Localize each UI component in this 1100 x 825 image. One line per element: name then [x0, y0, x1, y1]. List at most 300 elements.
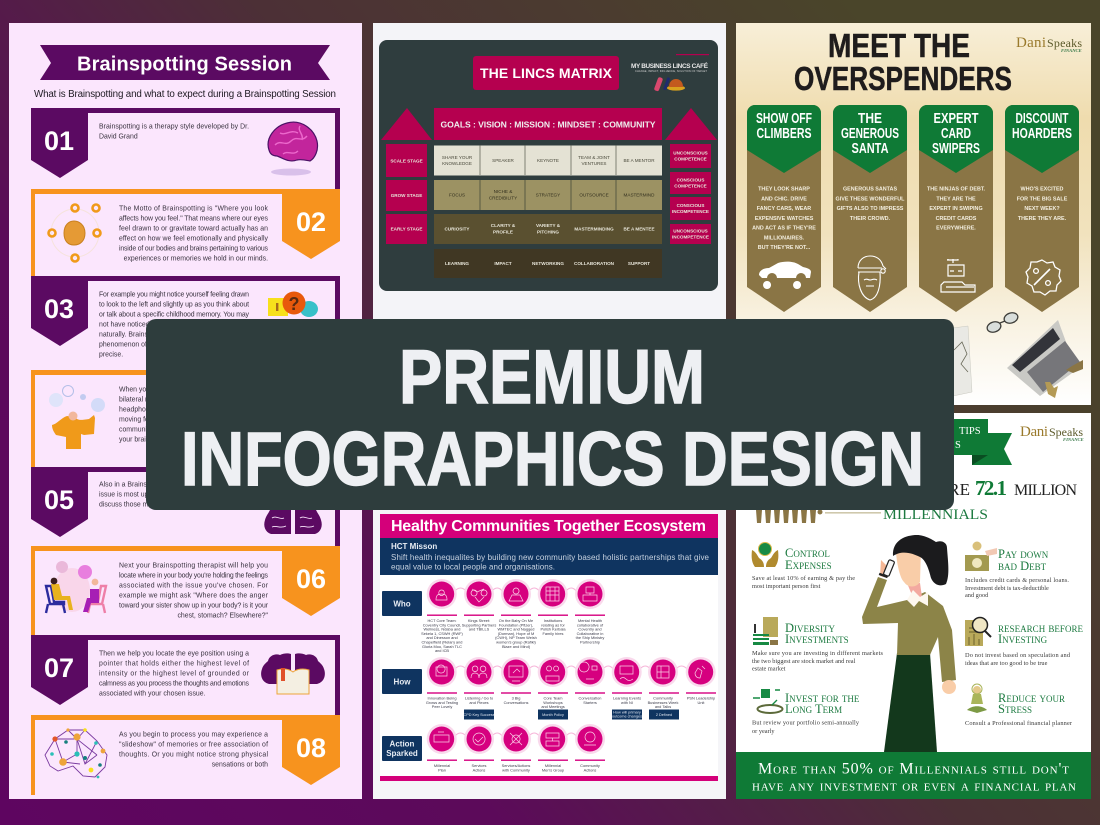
logo: Dani [1020, 424, 1048, 440]
card: show off climbers: THEY LOOK SHARP [758, 186, 810, 192]
card: the generous santa: THEIR CROWD. [850, 216, 891, 222]
logo: CHANGE, IMPACT, INFLUENCE, SOLUTION OF TARGET [635, 69, 707, 73]
tip: research before investing: research before [998, 621, 1084, 635]
step 07: pointer that holds either the highest level of [99, 660, 249, 668]
competence labels: INCOMPETENCE [672, 234, 709, 240]
tip: control expenses: most important person first [752, 583, 821, 590]
card: the generous santa [833, 105, 907, 312]
card: expert card swipers: EVERYWHERE. [936, 226, 976, 232]
icon: neural network brain [45, 728, 107, 778]
step 07: associated with your chosen issue. [99, 690, 206, 698]
row label: how [382, 669, 422, 694]
icon: brain with rings [48, 204, 100, 262]
tip: pay down bad debt: Includes credit cards & personal loans. [965, 577, 1069, 584]
matrix row: early: PROFILE [493, 230, 513, 234]
row: action captions [427, 760, 605, 772]
step 08: sensations or both [212, 762, 268, 768]
panel: healthy communities ecosystem [373, 505, 726, 799]
step 05: Also in a Brainspotting session [99, 482, 193, 488]
row: how captions [426, 692, 716, 720]
matrix row: grow [434, 180, 662, 210]
step 07 [31, 635, 340, 715]
matrix row: grow: OUTSOURCE [579, 192, 609, 198]
step 04: headphones [119, 406, 157, 414]
panel: millennials tips [736, 413, 1091, 799]
tip: invest for the long term: Invest for the [785, 691, 860, 705]
step 02: experiences or memories we hold in our minds. [124, 256, 268, 262]
matrix row: early: MASTERMINDING [574, 226, 614, 232]
row: who captions: Chapelfield (Relan) and [422, 640, 462, 644]
matrix row: early: CURIOSITY [444, 226, 470, 232]
row: who captions: Family hires [543, 631, 564, 636]
step 06 [31, 546, 340, 635]
row: who captions: Coventry and [578, 627, 602, 632]
card: discount hoarders: NEXT WEEK? [1024, 206, 1060, 212]
stage labels: EARLY STAGE [391, 226, 422, 232]
card: expert card swipers [919, 105, 993, 312]
row: action circles [427, 724, 605, 754]
heading ribbon: Brainspotting Session [77, 54, 292, 76]
icon: purple brain halves [264, 510, 322, 534]
step 03: to look to the left and slightly up as you think about [99, 302, 249, 308]
step 06: locate where in your body you're holding the feelings [119, 572, 269, 580]
tip: reduce your stress: Consult a Professional financial planner [965, 720, 1073, 727]
row label: action sparked: Action [390, 740, 415, 748]
icon: pink brain [268, 122, 318, 176]
row: action captions: Actions [473, 767, 485, 772]
step 02: inside of our bodies and brains pertaining to various [119, 246, 269, 252]
matrix row: early: VARIETY & [536, 223, 561, 228]
row: action captions: Millennial [545, 763, 561, 768]
matrix row: pillars [434, 249, 662, 278]
row: how captions: CPD Key Success [463, 713, 495, 717]
card: show off climbers: CLIMBERS [756, 126, 812, 142]
logo [1020, 424, 1084, 442]
connector waves [454, 588, 688, 737]
tip: diversify investments [752, 617, 884, 672]
card: show off climbers: AND CHIC. DRIVE [761, 196, 807, 202]
competence labels: INCOMPETENCE [672, 209, 709, 214]
step 06: 06 [296, 564, 326, 594]
footer callout: More than 50% of Millennials still don't [758, 760, 1069, 778]
stat headline: RE [948, 480, 970, 499]
tip: pay down bad debt: Investment debt is tax-deductible [965, 585, 1049, 592]
tip: research before investing: Do not invest based on speculation and [965, 652, 1071, 659]
matrix row: grow: NICHE & [494, 189, 512, 194]
card: expert card swipers: THE NINJAS OF DEBT. [927, 186, 986, 192]
step 06: example we might ask "Where does the anger [119, 592, 269, 600]
title: OVERSPENDERS [794, 60, 1012, 97]
step 05: discuss those moments [99, 502, 172, 508]
card: the generous santa: SANTA [852, 141, 889, 157]
mission box [380, 538, 718, 575]
tip: invest for the long term: But review your portfolio semi-annually [752, 720, 860, 726]
footer callout: have any investment or even a financial plan [752, 778, 1076, 794]
step 03: For example you might notice yourself feeling drawn [99, 292, 249, 298]
card: expert card swipers: THEY ARE THE [936, 196, 976, 202]
card: show off climbers: AND ACT AS IF THEY'RE [752, 226, 816, 232]
step 08: As you begin to process you may experience a [119, 732, 268, 738]
row: how captions: Conversation [579, 696, 601, 700]
tip: diversify investments: Investments [785, 632, 849, 646]
row: who captions: Supporting Partners [462, 622, 496, 627]
arrow: left triangle [381, 108, 432, 140]
row: who captions: the Ship Ministry [576, 635, 604, 640]
matrix row: pillars: IMPACT [494, 261, 512, 266]
card: the generous santa: GENEROUS SANTAS [843, 186, 897, 192]
row: how captions: 2 Defined [656, 713, 672, 717]
step 01: 01 [44, 126, 74, 156]
card: show off climbers: BUT THEY'RE NOT... [758, 245, 811, 251]
card: show off climbers: SHOW OFF [756, 111, 812, 127]
icon: question bubbles: ? [288, 294, 300, 314]
tip: control expenses [752, 542, 855, 590]
row: who captions: women's group (Rafiki) [496, 640, 537, 644]
row: who captions: collaborative of [577, 622, 604, 627]
ribbon heading: S [955, 440, 961, 451]
footer callout [736, 752, 1091, 799]
pictogram: people [756, 510, 881, 523]
logo: Dani [1016, 35, 1046, 51]
heading ribbon [40, 45, 330, 80]
step 04: When you are [119, 386, 162, 394]
matrix row: early [434, 214, 662, 244]
matrix row: pillars: COLLABORATION [574, 261, 615, 266]
row: how captions: Learning Events [613, 696, 641, 700]
card: expert card swipers: EXPERT [934, 111, 979, 127]
row: who captions: and Dinesson and [426, 635, 458, 640]
panel: lincs matrix [373, 23, 726, 323]
step 04: communicate [119, 426, 160, 434]
step 03 [31, 276, 340, 370]
tip: invest for the long term: or yearly [752, 728, 775, 735]
step 04 [31, 370, 340, 467]
tip: control expenses: Expenses [785, 558, 832, 572]
ribbon heading [940, 419, 1012, 465]
step 06: chest, stomach? Elsewhere?" [177, 612, 269, 620]
row: how circles [427, 657, 716, 687]
competence labels [670, 144, 711, 244]
matrix row: scale: KNOWLEDGE [442, 161, 472, 166]
tip: control expenses: Save at least 10% of earning & pay the [752, 575, 855, 582]
row: how captions: with NI [621, 700, 633, 705]
title [794, 27, 1012, 97]
tip: pay down bad debt: Pay down [998, 547, 1049, 561]
row: who captions [421, 614, 605, 653]
mission box: Shift health inequalites by building new community based holistic partnerships that give [391, 553, 710, 562]
row: who captions: Sekela 1, CSWH (RWF) [421, 631, 464, 636]
matrix row: early: PITCHING [537, 230, 559, 234]
matrix row: scale: VENTURES [581, 161, 607, 166]
row: who captions: Collaborative in [577, 631, 603, 636]
card: show off climbers: MILLIONAIRES. [764, 235, 805, 241]
icon: therapy conversation [46, 561, 106, 613]
step 03: precise. [99, 352, 123, 358]
tip: research before investing: ideas that are too good to be true [965, 660, 1048, 667]
row: action captions: Plan [438, 767, 446, 772]
step 07: 07 [44, 653, 74, 683]
competence labels: UNCONSCIOUS [673, 228, 708, 234]
footer bar [380, 776, 718, 781]
tip: reduce your stress [965, 684, 1073, 727]
row: how captions: 3 Big [512, 696, 520, 700]
tip: invest for the long term: Long Term [785, 702, 842, 716]
card: the generous santa: GIFTS ALSO TO IMPRESS [837, 206, 904, 212]
step 02 [31, 189, 340, 276]
matrix row: scale: TEAM & JOINT [578, 155, 610, 160]
tip: pay down bad debt [965, 542, 1069, 599]
step 07: intensity or the highest level of grounded or [99, 670, 250, 678]
tip: invest for the long term [752, 689, 860, 735]
matrix row: pillars: NETWORKING [532, 261, 564, 266]
matrix row: pillars: SUPPORT [628, 261, 650, 266]
card: discount hoarders: FOR THE BIG SALE [1017, 196, 1068, 202]
matrix row: grow: STRATEGY [536, 192, 560, 198]
card: show off climbers: FANCY CARS, WEAR [757, 206, 811, 212]
row label: action sparked [382, 736, 422, 761]
logo [631, 54, 709, 92]
card: show off climbers: EXPENSIVE WATCHES [755, 216, 814, 222]
matrix row: pillars: LEARNING [445, 261, 469, 266]
row: who captions: WMTEC and Nagged [498, 627, 534, 632]
row: action captions: Millennial [434, 763, 450, 768]
icon: thinking person [49, 386, 105, 449]
stat headline: 72.1 [975, 476, 1007, 500]
step 02: affects how you feel." That means where our eyes [119, 216, 269, 222]
stat headline [883, 476, 1077, 523]
tip: reduce your stress: Stress [998, 702, 1032, 716]
row: who captions: Gloria Moo, Sarah TLC [422, 644, 462, 649]
row: how captions: Starters [583, 700, 597, 705]
step 01 [31, 108, 340, 189]
title overlay banner [146, 319, 954, 510]
mission box: equal value to local people and organisations. [391, 562, 555, 572]
stat headline: MILLION [1014, 482, 1077, 499]
row label: action sparked: Sparked [386, 749, 418, 758]
row: who captions: Coventry City Council, [423, 622, 461, 627]
competence labels: COMPETENCE [674, 184, 707, 188]
row: action captions: Services/Actions [502, 763, 530, 768]
card: expert card swipers: CARD [941, 126, 971, 142]
step 04: your brain [119, 436, 150, 444]
goals bar [434, 108, 662, 140]
row: how captions: and Meetings [541, 704, 565, 709]
step 04: bilateral music [119, 396, 164, 404]
tip: research before investing [965, 618, 1084, 667]
row: who captions: Mental Health [578, 618, 602, 623]
tip: control expenses: Control [785, 546, 830, 560]
competence labels: UNCONSCIOUS [673, 150, 708, 156]
row: how captions: Businesses Week [648, 700, 678, 705]
tip: research before investing: Investing [998, 632, 1048, 646]
step 03: 03 [44, 294, 74, 324]
heading: THE LINCS MATRIX [480, 65, 613, 81]
logo: Speaks [1049, 425, 1083, 439]
card: the generous santa: THE [858, 111, 882, 127]
card: expert card swipers: CREDIT CARDS [936, 216, 977, 222]
heading bar: Healthy Communities Together Ecosystem [391, 518, 706, 535]
row label: who [382, 591, 422, 616]
matrix row: scale: SPEAKER [492, 158, 515, 163]
logo: Speaks [1047, 36, 1082, 50]
step 01: David Grand [99, 134, 138, 140]
matrix row: scale: SHARE YOUR [442, 155, 473, 160]
logo: MY BUSINESS LINCS CAFÉ [631, 61, 709, 70]
illustration: glasses [986, 311, 1019, 334]
step 08 [31, 715, 340, 795]
tip: pay down bad debt: and good [965, 592, 989, 599]
row: how captions: Conversations [504, 700, 528, 705]
goals bar: GOALS : VISION : MISSION : MINDSET : COMMUNITY [440, 120, 656, 130]
step 06: Next your Brainspotting therapist will help you [119, 562, 268, 570]
step 04: moving focus [119, 416, 160, 424]
row: who captions: and TBILLS [469, 627, 490, 632]
step 02: The Motto of Brainspotting is "Where you look [119, 206, 269, 212]
row: who captions: HCT Core Team: [427, 618, 457, 623]
matrix row: early: BE A MENTEE [623, 226, 655, 232]
icon: santa [858, 256, 886, 300]
card: the generous santa: GIVE THESE WONDERFUL [836, 196, 905, 202]
row: who captions: and ICB [435, 648, 449, 653]
icon: card machine [941, 259, 975, 292]
matrix row: early: CLARITY & [491, 223, 516, 228]
row: who captions: Blaze and Mind) [502, 644, 531, 649]
row: who captions: (CWH), NP Team Welsh [495, 635, 537, 640]
row: action captions: Services [472, 763, 487, 768]
step 02: feel drawn to or gravitate toward actually has an [119, 226, 268, 232]
matrix row: grow: FOCUS [449, 192, 465, 198]
step 08: "slideshow" of memories or free association of [119, 742, 268, 748]
card: show off climbers [747, 105, 821, 312]
heading [473, 56, 619, 90]
step 05: issue is most upsetting to you [99, 492, 190, 498]
row: who captions: Wellness, Ndaba and [424, 627, 460, 632]
step 07: Then we help you locate the eye position using a [99, 650, 249, 658]
title line 1: PREMIUM [399, 335, 705, 420]
row: how captions: Community [653, 696, 673, 700]
title line 2: INFOGRAPHICS DESIGN [181, 417, 924, 502]
row: how captions: Workshops [543, 700, 563, 705]
row: how captions: Unit [698, 700, 705, 705]
tip: pay down bad debt: bad Debt [998, 559, 1047, 573]
row: how captions: Core Team [544, 696, 562, 700]
icon: percent badge [1026, 260, 1061, 295]
illustration: woman on phone [862, 535, 956, 752]
step 03: not have noticed this before but [99, 322, 195, 328]
logo: FINANCE [1061, 48, 1082, 53]
row: how captions: Peer Lovely [432, 704, 452, 709]
step 02: 02 [296, 207, 326, 237]
logo: FINANCE [1063, 437, 1084, 442]
step 03: or talk about a specific childhood memory. You may [99, 312, 250, 318]
row: who captions: relating as for [541, 622, 565, 627]
ribbon heading: TIPS [959, 426, 981, 437]
title: MEET THE [828, 27, 970, 64]
row: who captions: Polish Kerbala [540, 627, 566, 632]
step 02: effect on how we feel emotionally and physically [119, 236, 269, 242]
tip: reduce your stress: Reduce your [998, 691, 1065, 705]
step 03: naturally. Brainspotting uses this [99, 332, 198, 338]
card: discount hoarders [1005, 105, 1079, 312]
illustration: laptop [1007, 320, 1083, 398]
icon: car [759, 262, 811, 289]
row: how captions: outcome changes [612, 714, 642, 718]
step 08: thoughts. Or you might notice strong physical [119, 752, 268, 758]
row: who circles [427, 579, 605, 609]
stage labels: SCALE STAGE [390, 158, 423, 164]
step 07: calmness as you process the thoughts and emotions [99, 680, 250, 688]
competence labels: CONSCIOUS [677, 178, 704, 182]
mission box: HCT Misson [391, 542, 437, 551]
icon: brain and book [261, 653, 325, 694]
row: how captions: How will primary [613, 710, 641, 714]
tip: diversify investments: Diversity [785, 621, 836, 635]
tip: diversify investments: the two biggest are stock market and real [752, 658, 856, 665]
row: who captions: Partnership [580, 640, 600, 644]
stat headline: MILLENNIALS [883, 507, 988, 523]
row: who captions: On the Baby On Me [499, 618, 533, 623]
row: who captions: Institutions [544, 618, 562, 623]
stage labels: GROW STAGE [391, 193, 422, 198]
panel: meet the overspenders [736, 23, 1091, 405]
card: discount hoarders: THERE THEY ARE. [1018, 216, 1067, 222]
card: discount hoarders: DISCOUNT [1016, 111, 1069, 127]
row: who captions: Foundation (Pfizer), [499, 622, 533, 627]
heading bar [380, 514, 718, 538]
card: expert card swipers: EXPERT IN SWIPING [929, 206, 983, 212]
row: how captions: PSN Leadership [687, 696, 715, 700]
row: who captions: (Dorman), Hope of M [498, 631, 534, 636]
matrix row: grow: CREDIBILITY [489, 196, 517, 200]
stage labels [386, 144, 427, 244]
subtitle: What is Brainspotting and what to expect during a Brainspotting Session [34, 89, 336, 100]
step 05 [31, 467, 340, 546]
panel: brainspotting session [9, 23, 362, 799]
matrix row: grow: MASTERMIND [624, 192, 655, 198]
icon: question bubbles [268, 292, 318, 317]
step 06: toward your sister show up in your body? is it your [119, 602, 269, 610]
matrix row: scale: BE A MENTOR [623, 158, 655, 163]
row: action captions: Actions [584, 767, 596, 772]
card: the generous santa: GENEROUS [841, 126, 899, 142]
row: action captions: with Community [502, 767, 530, 772]
arrow: right triangle [665, 108, 717, 140]
card: discount hoarders: WHO'S EXCITED [1021, 186, 1064, 192]
card: expert card swipers: SWIPERS [932, 141, 980, 157]
competence labels: CONSCIOUS [677, 203, 704, 208]
matrix row: scale [434, 145, 662, 176]
row: how captions: Month Policy [542, 713, 564, 717]
step 03: phenomenon of eye position to be [99, 342, 203, 348]
row: how captions: Innovation Being [428, 696, 456, 700]
logo [1016, 35, 1082, 53]
step 05: 05 [44, 485, 74, 515]
step 01: Brainspotting is a therapy style developed by Dr. [99, 124, 249, 130]
matrix row: scale: KEYNOTE [537, 158, 559, 163]
tip: diversify investments: estate market [752, 666, 786, 672]
row: who captions: Kings Street: [468, 618, 490, 623]
row: how captions: and Talks [655, 704, 671, 709]
row: how captions: and Pieces [469, 700, 489, 705]
row: action captions: Men's Group [542, 767, 564, 772]
competence labels: COMPETENCE [674, 156, 707, 162]
step 08: 08 [296, 733, 326, 763]
row: how captions: Grows and Testing [426, 700, 458, 705]
card: discount hoarders: HOARDERS [1012, 126, 1072, 142]
illustration: paper on desk [953, 326, 972, 396]
row label: who: Who [393, 600, 411, 608]
row: action captions: Community [580, 763, 600, 768]
